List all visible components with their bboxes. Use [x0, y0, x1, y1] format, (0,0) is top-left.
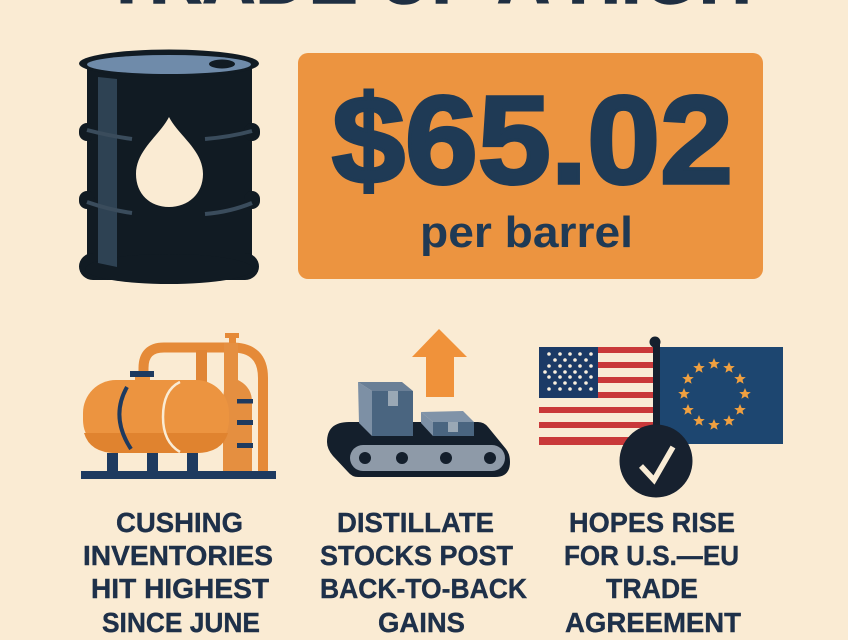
caption: Cushing inventories	[83, 507, 273, 638]
caption: Cushing inventories: CUSHING	[116, 507, 243, 538]
caption: trade agreement: TRADE	[606, 573, 698, 604]
caption: Cushing inventories: INVENTORIES	[83, 540, 273, 571]
price value: $65.02	[332, 71, 733, 210]
caption: trade agreement: AGREEMENT	[565, 607, 741, 638]
icon: oil barrel	[79, 50, 260, 284]
caption: Cushing inventories: HIT HIGHEST	[91, 573, 269, 604]
panel: price	[298, 53, 763, 279]
caption: distillate stocks	[320, 507, 527, 638]
icon: storage tank	[81, 333, 276, 479]
caption: trade agreement: HOPES RISE	[569, 507, 735, 538]
caption: Cushing inventories: SINCE JUNE	[102, 607, 260, 638]
caption: trade agreement	[564, 507, 741, 638]
arrow: up	[412, 329, 467, 397]
EU flag	[659, 347, 783, 444]
caption: distillate stocks: BACK-TO-BACK	[320, 573, 527, 604]
icon: US and EU flags	[539, 336, 783, 498]
icon: conveyor with boxes	[327, 329, 510, 477]
caption: distillate stocks: GAINS	[378, 607, 465, 638]
caption: trade agreement: FOR U.S.—EU	[564, 540, 739, 571]
caption: distillate stocks: DISTILLATE	[337, 507, 494, 538]
icon: check badge	[620, 424, 692, 498]
icon: oil drop	[136, 117, 203, 207]
US flag	[539, 347, 654, 445]
price unit: per barrel	[420, 208, 633, 257]
caption: distillate stocks: STOCKS POST	[320, 540, 513, 571]
